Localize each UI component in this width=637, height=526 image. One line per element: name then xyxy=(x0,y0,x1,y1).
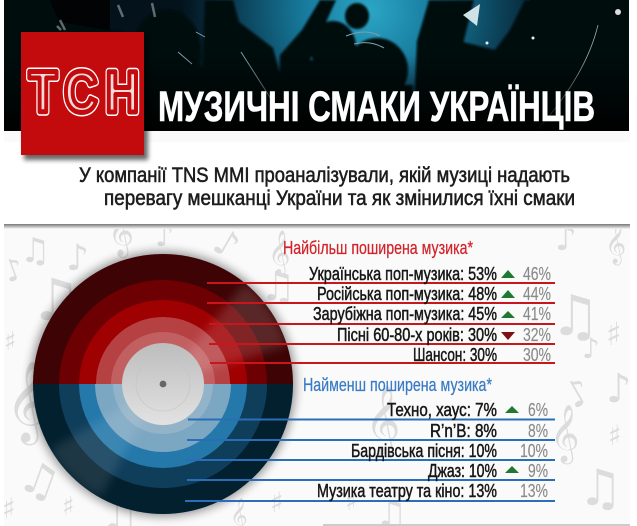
intro text: перевагу мешканці України та як змінилися їхні смаки xyxy=(104,187,575,210)
logo: TCH red square: ТСН xyxy=(29,60,139,125)
row: techno, house: Техно, хаус: 7% xyxy=(387,400,497,420)
header photo: concert crowd xyxy=(4,0,629,131)
row: Russian pop xyxy=(207,284,555,304)
row: theatre and film music xyxy=(185,481,555,501)
background music-note pattern: 𝄞 xyxy=(268,230,290,276)
row: jazz xyxy=(187,461,555,481)
background music-note pattern: ♫ xyxy=(12,450,67,511)
logo: TCH red square: ТСН xyxy=(29,60,139,125)
background music-note pattern: 𝄞 xyxy=(365,385,400,457)
background music-note pattern: ♪ xyxy=(66,238,89,279)
crowd silhouettes xyxy=(4,0,629,131)
background music-note pattern: ♪ xyxy=(606,366,632,412)
row: Ukrainian pop xyxy=(207,264,555,284)
row: foreign pop xyxy=(209,304,555,324)
row: Russian pop: Російська поп-музика: 48% xyxy=(317,284,497,304)
white intro band xyxy=(4,142,630,229)
row: jazz: Джаз: 10% xyxy=(428,461,497,481)
vinyl centre label xyxy=(122,343,204,425)
row: R'n'B: R’n’B: 8% xyxy=(430,421,497,441)
background music-note pattern: ♪ xyxy=(206,221,246,268)
row: songs of the 60s-80s xyxy=(209,325,555,345)
background music-note pattern: ♯ xyxy=(608,419,622,452)
background music-note pattern: ♪ xyxy=(155,219,174,254)
background music-note pattern: ♯ xyxy=(2,492,16,525)
row: theatre and film music: 13% xyxy=(520,481,548,501)
background music-note pattern: ♪ xyxy=(582,332,600,365)
vinyl record chart xyxy=(31,252,295,516)
background music-note pattern: 𝄞 xyxy=(108,205,134,258)
background music-note pattern: ♯ xyxy=(4,327,17,357)
background music-note pattern: ♪ xyxy=(555,219,577,259)
row: songs of the 60s-80s: Пісні 60-80-х років: 30% xyxy=(337,325,497,345)
row: techno, house: 6% xyxy=(528,400,548,420)
background music-note pattern: ♫ xyxy=(550,284,600,349)
background music-note pattern: 𝄞 xyxy=(550,404,580,465)
heading: least popular music: Найменш поширена музика* xyxy=(303,375,492,395)
row: foreign pop: 41% xyxy=(523,304,551,324)
rows: least popular music xyxy=(185,400,555,501)
row: chanson xyxy=(210,345,555,365)
background music-note pattern xyxy=(0,131,632,526)
background music-note pattern: 𝄞 xyxy=(605,222,626,265)
background music-note pattern: ♯ xyxy=(345,487,358,517)
rows: most popular music xyxy=(207,264,555,365)
row: bard song: 10% xyxy=(520,441,548,461)
background music-note pattern: ♫ xyxy=(20,231,50,271)
vinyl bottom half: blue rings xyxy=(33,384,293,514)
row: theatre and film music: Музика театру та кіно: 13% xyxy=(317,481,497,501)
intro text: У компанії TNS MMI проаналізували, якій музиці надають xyxy=(79,164,570,187)
background music-note pattern: ♫ xyxy=(578,459,623,517)
background music-note pattern: ♯ xyxy=(606,315,621,353)
row: chanson: 30% xyxy=(523,345,551,365)
row: bard song xyxy=(186,441,555,461)
row: bard song: Бардівська пісня: 10% xyxy=(351,441,497,461)
row: jazz: 9% xyxy=(528,461,548,481)
row: Russian pop: 44% xyxy=(523,284,551,304)
background music-note pattern: 𝄞 xyxy=(6,360,47,445)
row: techno, house xyxy=(188,400,555,420)
heading: most popular music: Найбільш поширена музика* xyxy=(283,238,473,258)
logo: TCH red square xyxy=(21,32,148,160)
row: Ukrainian pop: 46% xyxy=(523,264,551,284)
row: foreign pop: Зарубіжна поп-музика: 45% xyxy=(313,304,497,324)
background music-note pattern: ♫ xyxy=(260,264,296,310)
row: R'n'B xyxy=(187,421,555,441)
background music-note pattern: ♫ xyxy=(30,266,82,334)
background music-note pattern: ♯ xyxy=(270,486,284,519)
intro text xyxy=(79,164,575,210)
background music-note pattern: ♪ xyxy=(558,370,598,417)
vinyl top half: red rings xyxy=(33,254,293,384)
row: chanson: Шансон: 30% xyxy=(413,345,497,365)
background music-note pattern: ♯ xyxy=(62,492,75,522)
row: R'n'B: 8% xyxy=(528,421,548,441)
row: Ukrainian pop: Українська поп-музика: 53% xyxy=(309,264,497,284)
row: songs of the 60s-80s: 32% xyxy=(523,325,551,345)
